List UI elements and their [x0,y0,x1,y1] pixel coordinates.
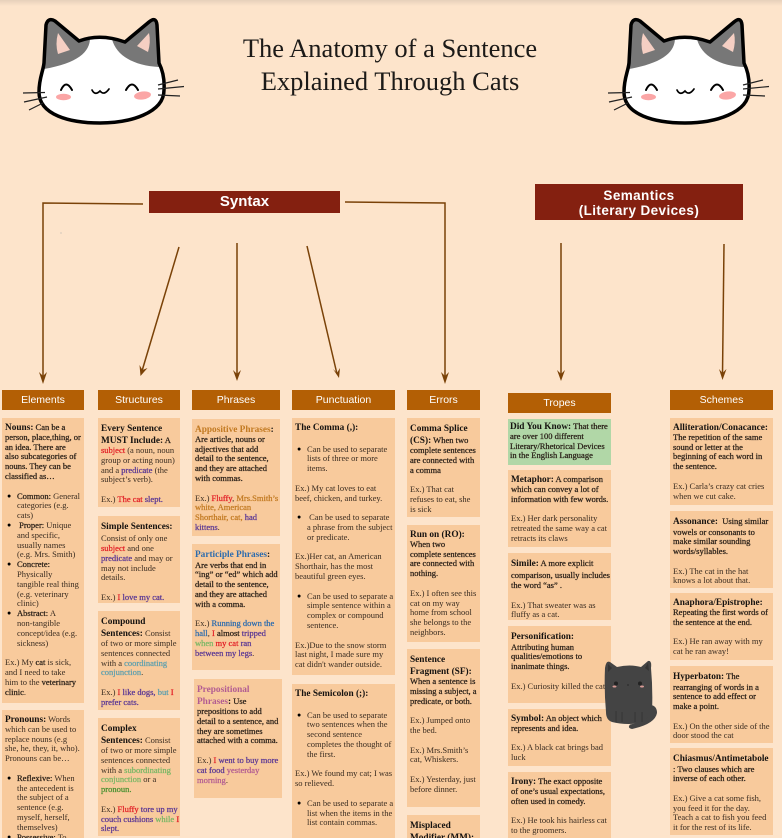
card: The Comma: beautiful green eyes. [295,571,366,581]
card: Sentence Fragment: Ex.) Yesterday, just [410,774,476,784]
card: Alliteration: the sentence. [673,461,717,471]
card: Complex Sentences [98,718,180,836]
heading: Semantics: Semantics [603,188,675,203]
card: Every Sentence: Every Sentence [101,424,162,434]
card: Participle Phrases: hall, I almost tripped [195,628,266,638]
card: Assonance: words/syllables. [673,546,728,556]
card: Compound Sentences: sentences connected [101,648,170,658]
card: The Comma: ● [297,592,301,600]
card: Alliteration: Alliteration/Conacance: [673,423,768,433]
card: Simple Sentences: Ex.) I love my cat. [101,592,164,602]
card: Pronouns: ● [7,774,11,782]
card: Every Sentence: subject’s verb). [101,474,153,484]
card: Symbol: Ex.) A black cat brings bad [511,742,603,752]
card: Nouns: concept/idea (e.g. [17,628,77,638]
card: Nouns: Proper: Unique [19,520,71,530]
card: Sentence Fragment: Sentence [410,655,445,665]
card: Nouns [2,418,84,703]
card: Simile: comparison, usually includes [511,570,610,580]
card: Nouns: nouns. They can be [5,461,71,471]
card: The Semicolon: list when the items in the [307,808,392,818]
card: Irony [508,772,611,838]
card: Run on: Ex.) I often see this [410,588,476,598]
card: Run on [407,525,480,642]
card: Anaphora/Epistrophe: Ex.) He ran away with my [673,636,763,646]
card: Nouns: Common: General [17,491,80,501]
card: Run on: home from school [410,607,472,617]
card: Simile: Simile: A more explicit [511,558,593,569]
card: Simple Sentences: details. [101,572,125,582]
card: The Comma: beef, chicken, and turkey. [295,493,382,503]
card: Compound Sentences: prefer cats. [101,697,139,707]
card: Prepositional Phrases: prepositions to add [197,706,262,716]
card: Nouns: Nouns: Can be a [5,422,65,433]
card: Prepositional Phrases: Prepositional [197,685,250,695]
card: Nouns: Ex.) My cat is sick, [5,657,71,667]
card: Simile: the word “as” . [511,580,562,590]
card: Complex Sentences: Sentences: Consist [101,734,170,746]
heading: Semantics: (Literary Devices) [579,203,699,218]
card: Symbol: Symbol: An object which [511,713,602,724]
card: The Semicolon: so relieved. [295,778,334,788]
card: Nouns: (e.g. veterinary [17,589,69,599]
column header: Tropes [508,393,611,413]
column header: Phrases: Phrases [217,394,255,406]
card: Sentence Fragment: cat, Whiskers. [410,754,458,764]
card: The Semicolon: the first. [307,749,335,759]
callout: Did You Know: are over 100 different [510,431,584,441]
card: Pronouns: sentence (e.g. [17,802,64,812]
card: Run on: When two [410,539,445,549]
card: Nouns: sickness) [17,638,48,648]
card: Every Sentence: MUST Include: A [101,434,171,446]
card: Complex Sentences: conjunction or a [101,774,156,784]
card: Compound Sentences: Compound [101,617,145,627]
card: Irony: Irony: The exact opposite [511,776,602,787]
card: Personification [508,626,611,703]
card: Assonance: knows a lot about that. [673,575,750,585]
card: Nouns: non-tangible [17,618,60,628]
card: The Semicolon: ● [297,711,301,719]
card: The Semicolon: two sentences when the [307,719,388,729]
card: Anaphora/Epistrophe: the sentence at the end. [673,617,752,627]
card: The Comma: ● [297,513,301,521]
card: Pronouns: Reflexive: When [17,773,75,783]
card: Comma Splice [407,418,480,517]
card: Comma Splice: is sick [410,504,432,514]
card: Appositive Phrases: with commas. [195,473,243,483]
card: Pronouns: the antecedent is [17,783,74,793]
column header: Errors [407,390,480,410]
card: Complex Sentences: couch cushions while I [101,814,179,824]
callout: Did You Know: in the English Language [510,450,593,460]
card: Compound Sentences: conjunction. [101,667,143,677]
card: The Comma: Ex.) My cat loves to eat [295,483,376,493]
card: Prepositional Phrases: cat food yesterday [197,765,259,775]
card: Pronouns: the subject of a [17,792,69,802]
card: The Comma: The Comma (,): [295,423,358,433]
card: Assonance: vowels or consonants to [673,526,755,536]
card: Participle Phrases: Ex.) Running down the [195,618,274,628]
card: The Comma: last night, I made sure my [295,649,383,659]
card: Nouns: ● [7,521,11,529]
card: Nouns: classified as… [5,471,55,481]
card: Simple Sentences: subject and one [101,543,154,553]
card: Appositive Phrases: Are article, nouns or [195,434,265,444]
card: The Semicolon: completes the thought of [307,739,391,749]
card: Comma Splice: Comma Splice [410,424,468,434]
card: Hyperbaton: rearranging of words in a [673,682,759,692]
card: Nouns: clinic) [17,598,39,608]
card: Run on: she belongs to the [410,617,471,627]
card: Irony: to the groomers. [511,825,566,835]
card: Every Sentence: Ex.) The cat slept. [101,494,163,504]
card: Hyperbaton: door stood the cat [673,730,734,740]
card: Complex Sentences: Ex.) Fluffy tore up my [101,804,178,814]
card: Simple Sentences [98,516,180,603]
card: Appositive Phrases: Appositive Phrases: [195,425,274,435]
column header: Tropes: Tropes [543,397,576,409]
arrows from headings to columns [39,201,726,384]
column header: Elements: Elements [21,394,65,406]
card: Chiasmus/Antimetabole: it for the rest of its life. [673,822,752,832]
column header: Schemes [670,390,773,410]
card: Metaphor: retracts its claws [511,533,568,543]
column header: Schemes: Schemes [700,394,743,406]
card: Complex Sentences: of two or more simple [101,745,177,755]
card: Alliteration: sound or letter at the [673,442,743,452]
card: The Comma: items. [307,463,328,473]
card: Simple Sentences: Simple Sentences: [101,522,173,532]
card: Personification: Personification: [511,632,574,642]
card: Pronouns: she, he, they, it, who). [5,743,80,753]
card: Comma Splice: are connected with [410,455,474,465]
card: Nouns: ● [7,560,11,568]
card: Run on: Run on (RO): [410,530,465,540]
card: Nouns: Abstract: A [17,608,56,618]
card: Every Sentence: subject (a noun, noun [101,445,174,455]
card: Hyperbaton: Ex.) On the other side of the [673,721,770,731]
card: Participle Phrases: and they are attached [195,589,267,599]
card: Complex Sentences: Complex [101,724,137,734]
card: The Semicolon: Ex.) We found my cat; I was [295,768,392,778]
title [243,33,537,96]
card: Pronouns: themselves) [17,822,58,832]
card: Alliteration: Ex.) Carla’s crazy cat cries [673,481,764,491]
card: Nouns: also subcategories of [5,451,76,461]
card: The Comma [292,418,395,675]
card: Alliteration: The repetition of the same [673,432,762,442]
card: Alliteration [670,418,773,505]
card: Nouns: clinic. [5,687,26,697]
card: Pronouns: which can be used to [5,724,76,734]
card: The Comma: Ex.)Her cat, an American [295,551,382,561]
column header: Errors: Errors [429,394,458,406]
card: The Semicolon [292,684,395,838]
card: Every Sentence: and a predicate (the [101,465,168,475]
card: Assonance [670,511,773,588]
card: Comma Splice: a comma [410,465,441,475]
card: Participle Phrases: detail to the sentence, [195,579,269,589]
card: The Comma: complex or compound [307,610,383,620]
card: Appositive Phrases: kittens. [195,522,220,532]
card: The Comma: Ex.)Due to the snow storm [295,640,386,650]
card: Metaphor: which can convey a lot of [511,484,599,494]
card: Nouns: person, place,thing, or [5,432,81,442]
card: Nouns: tangible real thing [17,579,79,589]
card: The Semicolon: list contain commas. [307,817,377,827]
card: Misplaced Modifier [407,815,480,838]
card: The Comma: Can be used to separate a [307,591,393,601]
card: Personification: Ex.) Curiosity killed the cat [511,681,605,691]
card: Compound Sentences: with a coordinating [101,658,167,668]
card: Metaphor: information with few words. [511,494,608,504]
card: Prepositional Phrases: Phrases: Use [197,696,246,706]
card: Metaphor: Ex.) Her dark personality [511,513,597,523]
card: Nouns: Physically [17,569,52,579]
card: Simple Sentences: Consist of only one [101,532,167,542]
card: Chiasmus/Antimetabole: Teach a cat to fish you feed [673,812,766,822]
card: Pronouns: myself, herself, [17,812,70,822]
card: Nouns: cats) [17,510,33,520]
card: Prepositional Phrases: morning. [197,775,228,785]
card: Pronouns [2,710,84,838]
card: The Semicolon: ● [297,799,301,807]
card: Simple Sentences: predicate and may or [101,553,173,563]
card: The Comma: sentence. [307,620,338,630]
card: The Comma: ● [297,445,301,453]
callout: Did You Know [508,419,611,465]
heading: Syntax: Syntax [220,193,269,210]
card: Compound Sentences: Ex.) I like dogs, but I [101,687,174,697]
card: Personification: Attributing human [511,642,574,652]
card: Metaphor: retreated the same way a cat [511,523,607,533]
card: Sentence Fragment: predicate, or both. [410,696,472,706]
card: Participle Phrases: Participle Phrases: [195,550,270,560]
card: Hyperbaton: Hyperbaton: The [673,671,739,682]
card: The Comma: Shorthair, has the most [295,561,373,571]
card: Complex Sentences: slept. [101,823,119,833]
card: Nouns: (e.g. Mrs. Smith) [17,549,75,559]
card: Participle Phrases: Are verbs that end in [195,560,266,570]
card: Participle Phrases [192,544,280,670]
column header: Structures: Structures [115,394,163,406]
card: Comma Splice: Ex.) That cat [410,484,454,494]
card: Personification: qualities/emotions to [511,651,582,661]
card: Nouns: and I need to take [5,667,65,677]
card: Appositive Phrases: and they are attached [195,463,267,473]
card: Nouns: and specific, [17,530,60,540]
card: Sentence Fragment: Ex.) Mrs.Smith’s [410,745,468,755]
card: Hyperbaton: make a point. [673,701,719,711]
card: The Semicolon: Can be used to separate [307,710,387,720]
card: Complex Sentences: with a subordinating [101,765,171,775]
card: Participle Phrases: between my legs. [195,648,254,658]
card: Chiasmus/Antimetabole: you feed it for the day. [673,803,750,813]
card: Complex Sentences: sentences connected [101,755,170,765]
icon: left cat head [23,18,184,125]
card: Chiasmus/Antimetabole: inverse of each other. [673,773,746,783]
column header: Structures [98,390,180,410]
card: Simile [508,553,611,620]
callout: Did You Know: Literary/Rhetorical Devices [510,441,605,451]
card: Nouns: an idea. There are [5,442,66,452]
card: Simile: fluffy as a cat. [511,609,559,619]
heading: Semantics [535,184,743,220]
card: Participle Phrases: with a comma. [195,599,245,609]
card: Alliteration: beginning of each word in [673,451,762,461]
card: Chiasmus/Antimetabole: Chiasmus/Antimetabole [673,754,769,764]
card: Metaphor [508,470,611,547]
heading: Syntax [149,191,340,213]
card: Compound Sentences: of two or more simple [101,638,177,648]
card: Appositive Phrases: Shorthair, cat, had [195,512,257,522]
card: Every Sentence: group or acting noun) [101,455,175,465]
card: Irony: often used in comedy. [511,796,586,806]
card: Anaphora/Epistrophe [670,593,773,660]
card: Assonance: Assonance: Using similar [673,516,768,527]
card: Nouns: categories (e.g. [17,500,69,510]
card: The Comma: Can be used to separate [307,444,387,454]
callout: Did You Know: Did You Know: That there [510,421,608,432]
card: Metaphor: Metaphor: A comparison [511,474,603,485]
card: The Comma: cat didn't wander outside. [295,659,382,669]
column header: Elements [2,390,84,410]
column header: Phrases [192,390,280,410]
card: Sentence Fragment: the bed. [410,725,437,735]
card: Irony: of one’s usual expectations, [511,786,605,796]
card: Comma Splice: (CS): When two [410,434,468,446]
card: Participle Phrases: “ing” or “ed” which add [195,569,278,579]
card: Run on: are connected with [410,558,474,568]
icon: right cat head [608,18,769,125]
card: Sentence Fragment [407,649,480,807]
card: Prepositional Phrases: Ex.) I went to buy more [197,755,278,765]
card: Appositive Phrases [192,419,280,536]
card: Chiasmus/Antimetabole: : Two clauses which are [673,764,754,774]
card: Sentence Fragment: missing a subject, a [410,686,477,696]
card: Prepositional Phrases: detail to a sentence, and [197,716,278,726]
card: Symbol [508,709,611,766]
card: The Comma: Can be used to separate [309,512,389,522]
title: Explained Through Cats [261,66,519,96]
card: Nouns: him to the veterinary [5,677,76,687]
card: Appositive Phrases: white, American [195,502,251,512]
card: Chiasmus/Antimetabole [670,748,773,835]
title: The Anatomy of a Sentence [243,33,537,63]
card: The Comma: or predicate. [307,532,349,542]
card: Alliteration: when we cut cake. [673,491,736,501]
card: Run on: neighbors. [410,627,446,637]
card: Assonance: Ex.) The cat in the hat [673,566,748,576]
card: Pronouns: replace nouns (e.g [5,734,67,744]
card: The Semicolon: The Semicolon (;): [295,689,368,699]
card: Simple Sentences: may not include [101,563,156,573]
card: Pronouns: Pronouns can be… [5,753,70,763]
card: Prepositional Phrases: they are sometimes [197,726,263,736]
card: Complex Sentences: pronoun. [101,784,131,794]
card: Nouns: ● [7,492,11,500]
card: Personification: inanimate things. [511,661,570,671]
card: The Semicolon: Can be used to separate a [307,798,393,808]
card: Sentence Fragment: Fragment (SF): [410,666,472,676]
card: Hyperbaton [670,666,773,743]
card: Every Sentence [98,418,180,507]
card: Comma Splice: complete sentences [410,445,476,455]
card: Appositive Phrases: detail to the sentence, [195,453,269,463]
card: Misplaced Modifier: Misplaced [410,821,451,831]
card: Sentence Fragment: Ex.) Jumped onto [410,715,470,725]
card: Compound Sentences: Sentences: Consist [101,628,170,638]
card: Anaphora/Epistrophe: Anaphora/Epistrophe: [673,598,763,608]
card: The Comma: a phrase from the subject [307,522,392,532]
card: The Semicolon: second sentence [307,729,362,739]
column header: Punctuation [292,390,395,410]
card: Irony: Ex.) He took his hairless cat [511,815,607,825]
icon: black cat [604,660,657,729]
card: Comma Splice: refuses to eat, she [410,494,470,504]
card: Run on: cat on my way [410,598,460,608]
card: Participle Phrases: when my cat ran [195,638,251,648]
card: Anaphora/Epistrophe: Repeating the first words of [673,607,768,617]
card: Anaphora/Epistrophe: cat he ran away! [673,646,729,656]
card: Run on: complete sentences [410,549,476,559]
card: Symbol: luck [511,752,526,762]
card: Sentence Fragment: before dinner. [410,784,457,794]
card: Nouns: usually names [17,540,65,550]
card: Prepositional Phrases [194,679,282,798]
card: Appositive Phrases: Ex.) Fluffy, Mrs.Smith’s [195,493,278,503]
card: Prepositional Phrases: attached with a comma. [197,735,278,745]
card: Compound Sentences [98,611,180,710]
card: Pronouns: Pronouns: Words [5,714,70,725]
card: Chiasmus/Antimetabole: Ex.) Give a cat some fish, [673,793,761,803]
card: Run on: nothing. [410,568,438,578]
card: Assonance: make similar sounding [673,536,750,546]
card: Nouns: ● [7,609,11,617]
card: Hyperbaton: sentence to add effect or [673,691,756,701]
card: Sentence Fragment: When a sentence is [410,676,475,686]
card: Simile: Ex.) That sweater was as [511,600,596,610]
card: Nouns: Concrete: [17,559,50,569]
card: The Comma: simple sentence within a [307,600,391,610]
column header: Punctuation: Punctuation [316,394,371,406]
card: Symbol: represents and idea. [511,723,578,733]
card: The Comma: lists of three or more [307,453,378,463]
card: Appositive Phrases: adjectives that add [195,444,258,454]
